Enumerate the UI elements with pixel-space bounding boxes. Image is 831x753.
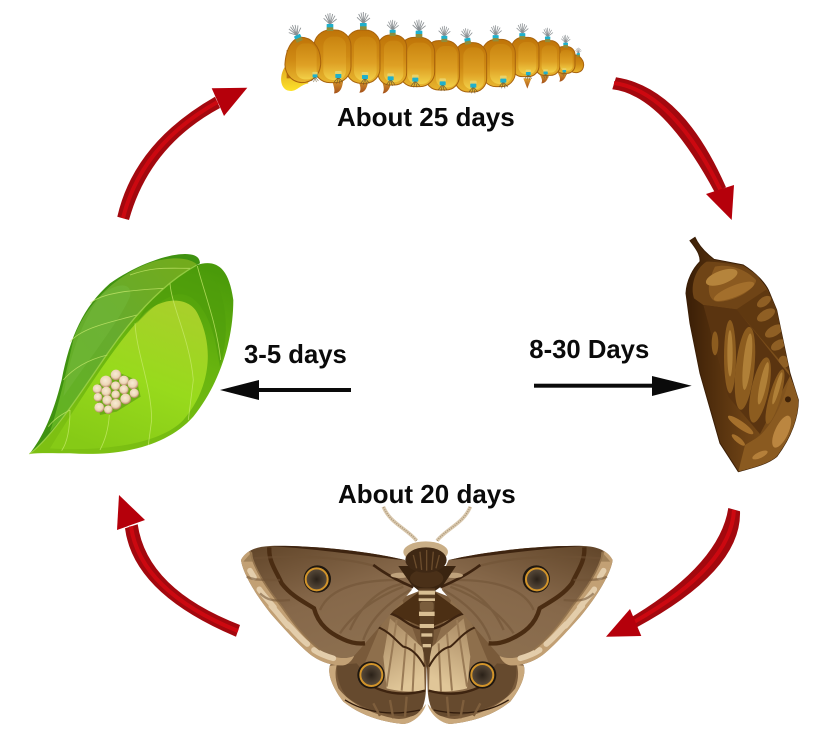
arrow: pupa to moth (606, 508, 740, 637)
egg cluster (93, 370, 141, 415)
moth (241, 507, 613, 724)
pupa silhouette (686, 237, 798, 472)
caterpillar feet (331, 72, 567, 93)
caterpillar body segments (285, 30, 584, 92)
leaf midrib and veins (29, 265, 221, 454)
caterpillar segment highlights (296, 37, 573, 89)
pupa lower tip (738, 376, 800, 472)
caterpillar body backing (287, 50, 572, 78)
label: 3-5 days: 3-5 days (244, 341, 347, 369)
caterpillar lower tufts (312, 68, 567, 93)
pupa head section (693, 262, 767, 309)
arrow: eggs to caterpillar (117, 88, 247, 220)
moth right half (427, 507, 613, 724)
leaf upper half (29, 254, 200, 454)
moth abdomen (418, 588, 435, 670)
arrow: moth to eggs (117, 495, 240, 637)
arrow: pupa duration (534, 376, 692, 396)
arrow: caterpillar to pupa (612, 77, 734, 220)
moth thorax (403, 541, 448, 588)
pupa abdomen rings (738, 290, 790, 372)
pupa wing case (703, 305, 790, 434)
label: 8-30 Days: 8-30 Days (529, 336, 649, 364)
pupa (686, 237, 800, 472)
caterpillar (281, 12, 584, 93)
caterpillar top tufts (287, 12, 582, 57)
label: About 25 days: About 25 days (337, 102, 515, 132)
moth central shadow (398, 566, 456, 592)
arrow: eggs duration (220, 380, 351, 400)
moth left half (241, 507, 427, 724)
leaf lower half (29, 263, 233, 454)
caterpillar tail (281, 67, 308, 91)
label: About 20 days: About 20 days (338, 479, 516, 509)
leaf with eggs (29, 254, 233, 454)
